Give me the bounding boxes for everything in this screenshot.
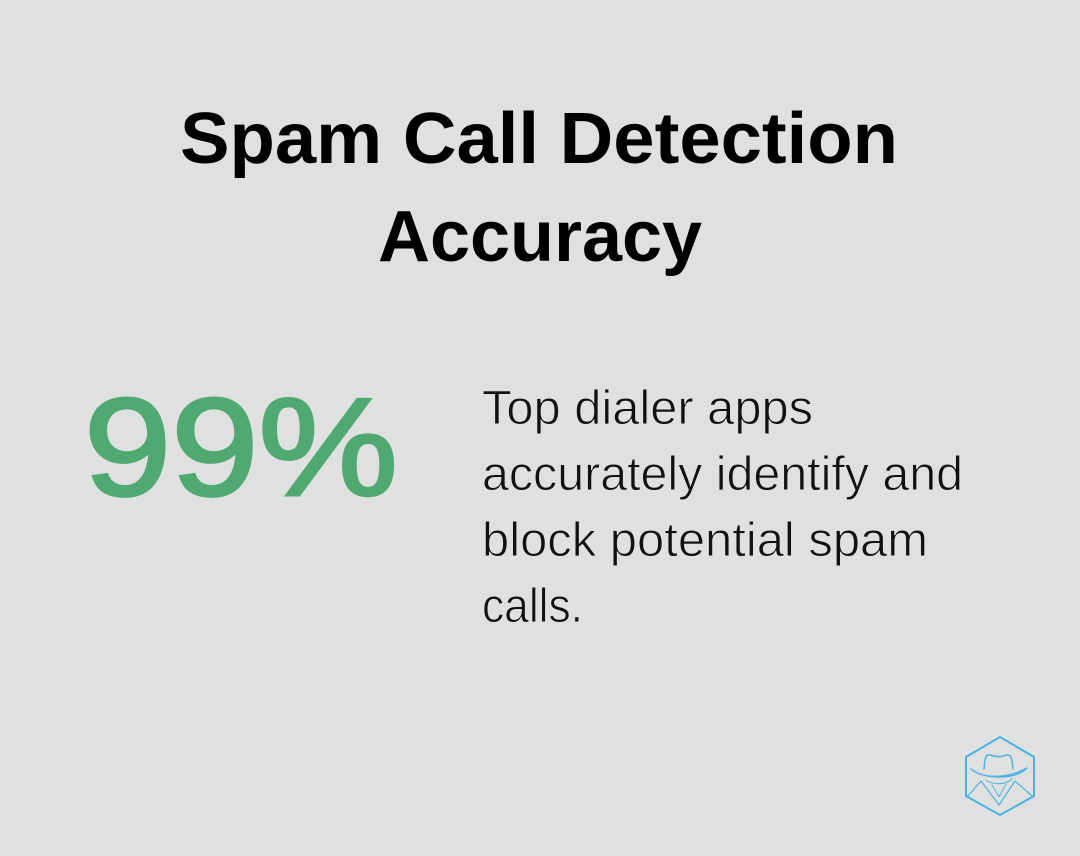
description text: Top dialer apps (482, 382, 813, 435)
description text: calls. (482, 580, 583, 633)
title: Spam Call Detection (180, 99, 898, 179)
description text: block potential spam (482, 514, 928, 567)
statistic: 99%: 99% (84, 370, 398, 525)
title (180, 99, 898, 277)
title: Accuracy (378, 197, 702, 277)
icon: hexagon logo with hat-wearing spy (966, 737, 1034, 815)
description text (482, 382, 963, 633)
description text: accurately identify and (482, 448, 963, 501)
